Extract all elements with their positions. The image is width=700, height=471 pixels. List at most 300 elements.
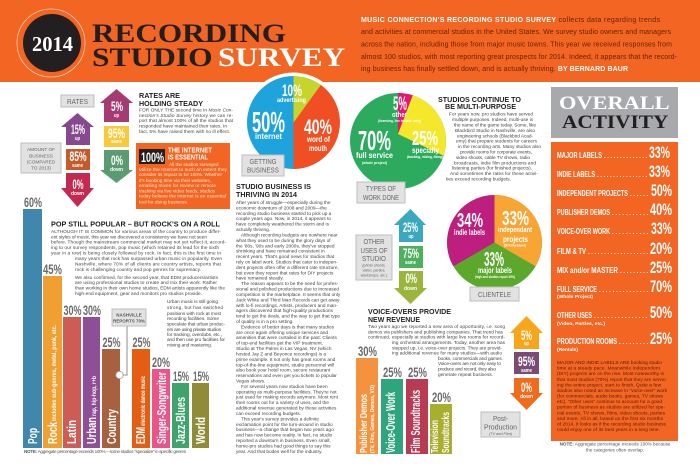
- bar: jazz-blues 15%: Jazz-Blues: [174, 397, 188, 444]
- text block: studio business: shrinking and have remained consistent in: [236, 249, 325, 255]
- label: getting business: GETTING: [250, 157, 277, 166]
- heading: studios multi-purpose: STUDIOS CONTINUE TO: [438, 95, 521, 104]
- arrow: 0% down: [510, 378, 543, 410]
- label: post-production: (TV and Film): [489, 432, 513, 436]
- text block: voice-overs: books, commercials and games.: [438, 356, 503, 362]
- title: STUDIO: [92, 43, 213, 72]
- text block: rates: port that almost 100% of all the studios that: [139, 118, 234, 124]
- text block: studio business: Studio at The Palms in Las Vegas, NV (which: [236, 346, 332, 352]
- text block: multi-purpose: ties exceed recording budgets.: [446, 177, 511, 183]
- text block: voice-overs: [368, 324, 506, 378]
- slice label: major labels: [475, 249, 516, 279]
- block: 75% same: [399, 245, 423, 268]
- heading: studio business is thriving: STUDIO BUSINESS IS: [236, 182, 311, 191]
- slice label: word of mouth: word of: [306, 135, 330, 144]
- row: mix and/or master: 25%: [650, 258, 672, 277]
- block: 95% same: 95%: [108, 125, 125, 141]
- text block: studio business: have remained steady.: [236, 276, 284, 282]
- row: publisher demos: 40%: [650, 200, 672, 219]
- row: other uses: (Video, Parties, etc.): [557, 321, 606, 326]
- note: genres: NOTE: Aggregate percentage exceeds 100% – some studios "specialize" in specific genres: [24, 449, 187, 454]
- text block: studio business: actually thriving.: [236, 227, 270, 233]
- block: 95% same: same: [111, 139, 122, 145]
- bar: urban 30%: [83, 302, 101, 448]
- block: 95% same: 95%: [518, 353, 535, 369]
- bar: edm 25%: electronic dance music: [140, 376, 147, 426]
- heading: voice-overs: VOICE-OVERS PROVIDE: [368, 307, 451, 316]
- bar: publisher demos 30%: 30%: [358, 343, 377, 359]
- text block: studio business: The reason appears to be the need for profes-: [241, 281, 339, 287]
- text block: summary: studios also noted an increase in "voice-over" work: [557, 388, 668, 394]
- block: 75% same: 75%: [403, 245, 419, 261]
- label: other uses of studio: [356, 235, 392, 280]
- block: 85% same: [66, 148, 90, 170]
- bar: voice-over work 25%: [381, 364, 403, 454]
- slice label: independent projects: independant: [498, 225, 532, 234]
- bar: latin 30%: [63, 302, 82, 448]
- bar: pop 60%: Pop: [26, 428, 40, 444]
- label: other uses of studio: USES OF: [360, 246, 388, 255]
- bar: country 25%: [102, 334, 121, 448]
- text block: studio business: can exceed recording budgets.: [236, 411, 301, 417]
- text block: pop: recording facilities. Some: [167, 316, 219, 322]
- slice label: internet: internet: [255, 132, 282, 141]
- slice label: specialty: (tracking, mixing, fixing): [407, 155, 444, 159]
- text block: multi-purpose: multiple purposes. Indeed, multi-use is: [452, 117, 534, 123]
- arrow: 25% up: [394, 209, 426, 242]
- text block: pop: rock is challenging country and pop genres for supremacy.: [75, 267, 201, 273]
- label: post-production: [481, 412, 520, 437]
- bar: edm 25%: EDM: [134, 427, 148, 444]
- row: major labels: [557, 143, 670, 162]
- label: other uses of studio: workshops, etc.): [361, 274, 388, 278]
- slice label: internet: 50%: [252, 107, 285, 139]
- panel: overall activity list: [551, 142, 678, 441]
- panel: overall activity title: ACTIVITY: [562, 112, 668, 133]
- label: post-production: Production: [484, 422, 517, 432]
- row: voice-over work: [557, 219, 672, 238]
- bar: publisher demos 30%: Publisher Demos: [359, 394, 370, 453]
- bar: voice-over work 25%: Voice-Over Work: [384, 392, 398, 453]
- text block: studio business: prime example. It not only has great rooms and: [236, 357, 336, 363]
- slice label: indie labels: 34%: [457, 210, 483, 232]
- label: clientele: CLIENTELE: [478, 290, 511, 299]
- slice label: word of mouth: 40%: [304, 116, 332, 139]
- slice label: specialty: 25%: [412, 128, 438, 150]
- label: other uses of studio: video, parties,: [363, 268, 385, 272]
- arrow: 5% up: [510, 316, 543, 349]
- text block: studio business: with lo-fi recordings. Artists, producers and man-: [236, 303, 338, 309]
- text block: voice-overs: Voice-overs are not only easy to: [438, 361, 501, 367]
- arrow: 0% down: [100, 150, 133, 183]
- text block: studio business: sional and polished productions due to increased: [236, 287, 339, 293]
- heading: studios multi-purpose: [438, 95, 521, 111]
- text block: rates: responded have maintained their rates. In: [139, 124, 227, 130]
- text block: multi-purpose: broadcasts, indie film productions and: [454, 160, 536, 166]
- row: independent projects: 50%: [651, 181, 672, 200]
- text block: summary: that most studios (70%) report that they are servic-: [557, 377, 667, 383]
- bar: world 15%: World: [194, 417, 208, 444]
- row: film and tv: 20%: [650, 239, 672, 258]
- arrow: 0% down: 0%: [406, 270, 417, 286]
- slice label: other: other: [392, 112, 407, 119]
- text block: studio business: Although recording budgets are nowhere near: [241, 232, 338, 238]
- row: voice-over work: 33%: [651, 219, 672, 238]
- row: production rooms: [557, 329, 672, 352]
- arrow: 0% down: down: [520, 394, 533, 400]
- text block: pop: are using professional studios to create and mix their work. Rather: [75, 280, 217, 286]
- bar: television soundtracks 20%: 20%: [432, 389, 451, 405]
- label: types of work done: [357, 182, 405, 203]
- bar: jazz-blues 15%: 15%: [173, 368, 189, 384]
- arrow: 5% up: 5%: [111, 98, 123, 114]
- text block: studio business: business—a change that began two years ago: [236, 427, 334, 433]
- text block: studio business: top-of-the-line equipment, studio personnel will: [236, 362, 334, 368]
- amount of business label: [21, 143, 61, 173]
- text block: studio business: economic downturn of 2008 and 2009—the: [236, 205, 327, 211]
- row: film and tv: [557, 239, 672, 258]
- callout: nashville: REPORTS 70%: [113, 318, 145, 324]
- row: voice-over work: VOICE-OVER WORK: [557, 227, 610, 236]
- text block: studio business: home-pro studios had good things to say this: [236, 444, 331, 450]
- text block: pop: than working in their own home studios, EDM artists apparently like the: [75, 286, 225, 292]
- arrow: 0% down: down: [71, 191, 84, 197]
- row: mix and/or master: MIX and/or MASTER: [557, 266, 618, 275]
- heading: studio business is thriving: THRIVING IN 2014: [236, 190, 298, 199]
- text block: studio business: rely on label work. Studios that cater to indepen-: [236, 260, 338, 266]
- arrow: 15% up: up: [75, 136, 80, 142]
- slice label: independent projects: projects: [503, 235, 528, 244]
- text block: pop: speculate that urban produc-: [167, 322, 225, 328]
- slice label: advertising: [277, 81, 306, 104]
- row: mix and/or master: .........: [620, 269, 649, 275]
- text block: summary: MAJOR AND INDIE LABELS ARE booking studio: [557, 360, 662, 366]
- row: indie labels: INDIE LABELS: [557, 170, 595, 179]
- text block: studio business: competition in the marketplace. It seems that only: [236, 292, 341, 298]
- text block: studio business: couple years ago. Now, in 2014, it appears to: [236, 216, 331, 222]
- row: full service: [557, 277, 672, 299]
- text block: studio business: additional revenue generated by these activities: [236, 406, 337, 412]
- arrow: 5% up: 5%: [521, 327, 532, 343]
- text block: pop: many years that rock has surpassed urban music in popularity. Even: [75, 256, 222, 262]
- arrow: 0% down: 0%: [521, 379, 532, 395]
- row: mix and/or master: [557, 258, 672, 277]
- text block: summary: (for commercials, audio books, games, TV shows: [557, 394, 664, 400]
- text block: studio business: have completely weathered the storm and is: [236, 222, 330, 228]
- arrow: 25% up: 25%: [403, 219, 418, 235]
- row: full service: (Whole Project): [557, 294, 594, 299]
- panel: the internet is essential: [136, 143, 230, 209]
- block: 85% same: 85%: [70, 148, 87, 164]
- text block: pop: [51, 229, 226, 348]
- text block: studio business: dent projects often offer a different rate structure,: [236, 265, 339, 271]
- slice label: advertising: advertising: [277, 98, 306, 104]
- text block: studio business: For several years now studios have been: [241, 384, 328, 390]
- bar: film soundtracks 25%: 25%: [408, 364, 427, 380]
- bar: rock 45%: Rock: [46, 422, 60, 444]
- chart: types of work pie: [350, 93, 446, 203]
- slice label: full service: full service: [356, 150, 393, 160]
- text block: multi-purpose: emy) that prepare students for careers: [456, 139, 538, 145]
- slice label: independent projects: 33%: [502, 208, 529, 230]
- slice label: other: (licensing, live transfer only): [378, 119, 422, 123]
- bar: rock 45%: 45%: [43, 261, 62, 277]
- slice label: indie labels: indie labels: [454, 228, 485, 237]
- text block: rates: fact, 5% have raised them with no ill effect.: [139, 129, 230, 135]
- row: indie labels: 33%: [649, 162, 670, 181]
- arrow: 0% down: 0%: [72, 176, 84, 192]
- year badge: [17, 9, 85, 77]
- bar: singer-songwriter 20%: Singer-Songwriter: [155, 372, 169, 444]
- amount of business label: (COMPARED: [27, 160, 56, 164]
- text block: voice-overs: Two years ago we reported a new area of opportunity, i.e. song: [368, 324, 505, 330]
- heading: rates are holding steady: HOLDING STEADY: [139, 99, 203, 108]
- bar: urban 30%: Urban: [85, 417, 99, 444]
- heading: studio business is thriving: [236, 182, 311, 199]
- panel: other uses arrows: [356, 209, 427, 304]
- row: voice-over work: ...........: [612, 230, 649, 236]
- slice label: major labels: (high-end studios report 40%): [475, 275, 516, 279]
- text block: studio business: of top-end facilities get the VIP treatment.: [236, 341, 323, 347]
- bar: publisher demos 30%: (TV, Film, Games, Demos, VO): [370, 385, 376, 453]
- label: other uses of studio: STUDIO: [362, 254, 386, 263]
- text block: pop: before. Though the mainstream commercial market may not yet reflect it, accord-: [51, 240, 226, 246]
- text block: rates: FOR ONLY THE second time in Music Con-: [139, 108, 233, 114]
- text block: studio business: year. And that bodes well for the industry.: [236, 449, 323, 455]
- slice label: word of mouth: mouth: [309, 144, 327, 153]
- slice label: full service: 70%: [358, 125, 391, 156]
- heading: voice-overs: NEW REVENUE: [368, 315, 420, 324]
- row: indie labels: [557, 162, 670, 181]
- text block: multi-purpose: the name of the game today. Some, like: [454, 122, 536, 128]
- amount of business label: TO 2013): [31, 166, 51, 170]
- intro text: [361, 17, 678, 73]
- text block: pop: high-end equipment, gear and monitors pro studios provide.: [75, 291, 202, 297]
- block: 95% same: [104, 125, 129, 147]
- label: other uses of studio: OTHER: [364, 237, 385, 246]
- text block: studio business: Vegas shows.: [236, 378, 265, 384]
- text block: multi-purpose: video shoots, cable TV shows, radio: [456, 155, 530, 161]
- text block: summary: [557, 360, 668, 433]
- text block: studio business: operating as multi-purpose facilities. They're not: [236, 389, 337, 395]
- text block: multi-purpose: Blackbird Studio in Nashville, are also: [455, 128, 535, 134]
- internet text: utilize the Internet to such an extent they: [139, 167, 228, 172]
- internet text: it's booking time via their websites,: [139, 178, 211, 183]
- arrow: 5% up: up: [524, 341, 529, 347]
- text block: voice-overs: continued, especially at studios with large live rooms for record-: [368, 334, 505, 340]
- internet text: tracking via live video feeds, studios: [139, 188, 216, 193]
- text block: multi-purpose: in the recording arts. Many studios also: [458, 144, 541, 150]
- text block: voice-overs: ing additional revenue for many studios—with audio: [392, 351, 502, 357]
- bar: latin 30%: 30%: [64, 302, 82, 318]
- heading: rates are holding steady: RATES ARE: [139, 91, 180, 100]
- slice label: independent projects: [498, 208, 532, 248]
- chart: clientele pie: [447, 195, 542, 301]
- row: major labels: MAJOR LABELS: [557, 151, 602, 160]
- slice label: other: 5%: [393, 94, 407, 115]
- arrow: 0% down: down: [404, 286, 417, 292]
- label: post-production: Post-: [493, 414, 508, 423]
- year badge: 2014: [32, 32, 73, 56]
- row: other uses: ................: [594, 314, 648, 320]
- callout: nashville: NASHVILLE: [116, 312, 142, 318]
- text block: studio business: are once again offering unique services and: [236, 330, 328, 336]
- chart: genres bar chart: [23, 194, 209, 448]
- internet text: today believe the internet is an essential: [139, 194, 226, 199]
- bar: pop 60%: [23, 194, 42, 448]
- heading: studios multi-purpose: BE MULTI-PURPOSE: [445, 102, 516, 111]
- heading: voice-overs: [368, 307, 451, 324]
- chart: revenue bars: [356, 343, 452, 454]
- row: production rooms: 25%: [650, 329, 672, 348]
- slice label: major labels: major labels: [478, 266, 512, 275]
- text block: pop: mixing and mastering.: [167, 342, 212, 348]
- text block: studio business: hosted Jay Z and Beyonce recordings) is a: [236, 352, 326, 358]
- 100% badge: 100%: [141, 149, 164, 165]
- block: 95% same: [514, 352, 539, 374]
- text block: summary: etc). "Other uses" continue to account for a good: [557, 399, 662, 405]
- text block: voice-overs: ing orchestral arrangements. Today, another area has: [392, 340, 506, 346]
- text block: studio business: tend to get the deals, and the way to get that type: [236, 314, 340, 320]
- bar: singer-songwriter 20%: [152, 354, 170, 448]
- heading: rates are holding steady: [139, 91, 203, 108]
- slice label: internet: [252, 107, 285, 141]
- label: types of work done: TYPES OF: [366, 184, 396, 193]
- bar: film soundtracks 25%: Film Soundtracks: [409, 390, 423, 453]
- text block: summary: and more. All in all, based on the first six months: [557, 416, 664, 422]
- row: full service: 70%: [650, 277, 672, 296]
- text block: studio business: Evidence of better days is that many studios: [241, 324, 335, 330]
- slice label: major labels: 33%: [484, 249, 504, 271]
- row: production rooms: (Rentals): [557, 347, 579, 352]
- text block: studio business: recent years. That's good news for studios that: [236, 254, 335, 260]
- panel: post-production arrows: [481, 316, 543, 437]
- text block: rates: nection's Studio Survey history we can re-: [139, 113, 233, 119]
- note: overall activity: NOTE: Aggregate percentage exceeds 100% because: [560, 442, 671, 447]
- text block: voice-overs: stepped up, i.e. voice-over projects. They are provid-: [392, 345, 502, 351]
- internet text: tool for doing business.: [139, 199, 188, 204]
- text block: studio business: recording studio business started to pick up a: [236, 211, 332, 217]
- intro text: and activities at commercial studios in the United States. We survey studio owners and managers: [361, 29, 672, 36]
- text block: pop: ent styles of music, this year we discovered a consistency we have not seen: [51, 234, 207, 240]
- bar: latin 30%: Latin: [65, 420, 79, 444]
- bar: rock 45%: includes sub-genres, metal, punk, etc.: [51, 325, 58, 421]
- slice label: full service: (whole project): [362, 160, 388, 165]
- internet heading: IS ESSENTIAL: [168, 152, 208, 162]
- intro text: MUSIC CONNECTION'S RECORDING STUDIO SURVEY collects data regarding trends: [361, 17, 660, 24]
- amount of business label: AMOUNT OF: [27, 147, 55, 152]
- text block: voice-overs: produce and record, they also: [438, 366, 496, 372]
- bar: publisher demos 30%: [356, 343, 378, 454]
- text block: studio business: [235, 200, 341, 455]
- text block: pop: positions with rock at most: [167, 311, 222, 317]
- panel: overall activity title: OVERALL: [559, 94, 670, 114]
- text block: pop: Urban music is still going: [167, 299, 218, 305]
- arrow: 0% down: [394, 270, 427, 304]
- row: full service: FULL SERVICE: [557, 285, 597, 294]
- text block: studio business: the '80s, '90s and early 2000s, they've stopped: [236, 243, 335, 249]
- intro text: ing business has finally settled down, and is actually thriving. BY BERNARD BAUR: [361, 66, 628, 73]
- title: SURVEY: [218, 43, 345, 72]
- row: production rooms: .........: [619, 340, 649, 346]
- bar: television soundtracks 20%: Soundtracks: [441, 412, 452, 453]
- text block: pop: and then use pro facilities for: [167, 337, 225, 343]
- bar: rock 45%: [43, 261, 62, 448]
- bar: urban 30%: rap, hip-hop, r+b: [91, 376, 98, 416]
- rates label: RATES: [67, 97, 88, 106]
- text block: studio business: agers discovered that high-quality productions: [236, 308, 334, 314]
- row: production rooms: PRODUCTION ROOMS: [557, 337, 617, 346]
- slice label: indie labels: [454, 210, 485, 237]
- row: publisher demos: [557, 200, 672, 219]
- row: other uses: 50%: [650, 303, 672, 322]
- heading: pop still popular: POP STILL POPULAR – BUT ROCK'S ON A ROLL: [51, 220, 220, 228]
- arrow: 5% up: [100, 89, 133, 122]
- bar: world 15%: 15%: [193, 368, 209, 384]
- intro text: across the nation, including those from major music towns. This year we received responses from: [361, 42, 672, 48]
- text block: studio business: but even they report that rates for DIY projects: [236, 270, 334, 276]
- title: RECORDING: [92, 19, 286, 48]
- internet heading: THE INTERNET: [168, 146, 212, 154]
- slice label: specialty: specialty: [412, 146, 439, 155]
- bar: urban 30%: 30%: [83, 302, 101, 318]
- internet text: emailing mixes for review or remote: [139, 183, 216, 188]
- text block: summary: time at a steady pace. Meanwhile independent: [557, 366, 661, 372]
- title: [92, 19, 345, 72]
- text block: pop: strong, but has switched: [167, 305, 223, 311]
- block: 95% same: same: [521, 368, 532, 374]
- text block: summary: could enjoy one of its best years in a long time.: [557, 427, 660, 433]
- panel: rates graphic: [21, 89, 133, 207]
- note: overall activity: [560, 442, 671, 453]
- row: publisher demos: PUBLISHER DEMOS: [557, 208, 610, 217]
- row: film and tv: FILM & TV: [557, 247, 586, 256]
- text block: studio business: just used for making records anymore. Most rent: [235, 395, 339, 401]
- intro text: almost 100 studios, with most reporting great prospects for 2014. Indeed, it appears that the record-: [361, 54, 678, 61]
- row: independent projects: ......: [630, 192, 649, 198]
- label: types of work done: WORK DONE: [363, 193, 399, 202]
- chart: getting business pie: [242, 72, 344, 176]
- text block: studio business: Jack White and Third Man Records can get away: [236, 297, 340, 303]
- row: independent projects: INDEPENDENT PROJECTS: [557, 189, 628, 198]
- text block: pop: ALTHOUGH IT IS COMMON for various areas of the country to produce differ-: [51, 229, 221, 235]
- text block: voice-overs: generate repeat business.: [438, 372, 493, 378]
- text block: summary: of 2014, it looks as if the recording studio business: [557, 422, 667, 428]
- slice label: advertising: 10%: [282, 81, 302, 100]
- bar: country 25%: 25%: [102, 334, 121, 350]
- row: major labels: ..............: [604, 154, 648, 160]
- bar: television soundtracks 20%: [430, 389, 452, 454]
- row: independent projects: [557, 181, 672, 200]
- text block: pop: ers are using private studios: [167, 327, 222, 333]
- bar: voice-over work 25%: 25%: [383, 364, 402, 380]
- text block: pop: We also confirmed, for the second year, that EDM producers/artists: [75, 275, 219, 281]
- label: getting business: BUSINESS: [247, 166, 279, 174]
- bar: world 15%: [192, 368, 209, 448]
- bar: television soundtracks 20%: Television: [430, 420, 441, 453]
- row: other uses: [557, 303, 672, 326]
- text block: studio business: amenities that were curtailed in the past. Clients: [236, 335, 337, 341]
- bar: singer-songwriter 20%: 20%: [152, 354, 170, 370]
- bar: country 25%: Country: [105, 409, 119, 444]
- text block: pop: for tracking, overdubs, etc.,: [167, 332, 222, 338]
- text block: summary: ing the entire project, start to finish. Quite a few: [557, 382, 662, 388]
- callout: nashville: [112, 309, 146, 379]
- note: overall activity: the categories often overlap.: [586, 448, 644, 453]
- text block: studio business: and has now become reality. In fact, no studio: [236, 433, 333, 439]
- text block: summary: portion of business as studios are utilized for spe-: [557, 405, 665, 411]
- text block: multi-purpose: listening parties (for finished projects).: [452, 166, 532, 172]
